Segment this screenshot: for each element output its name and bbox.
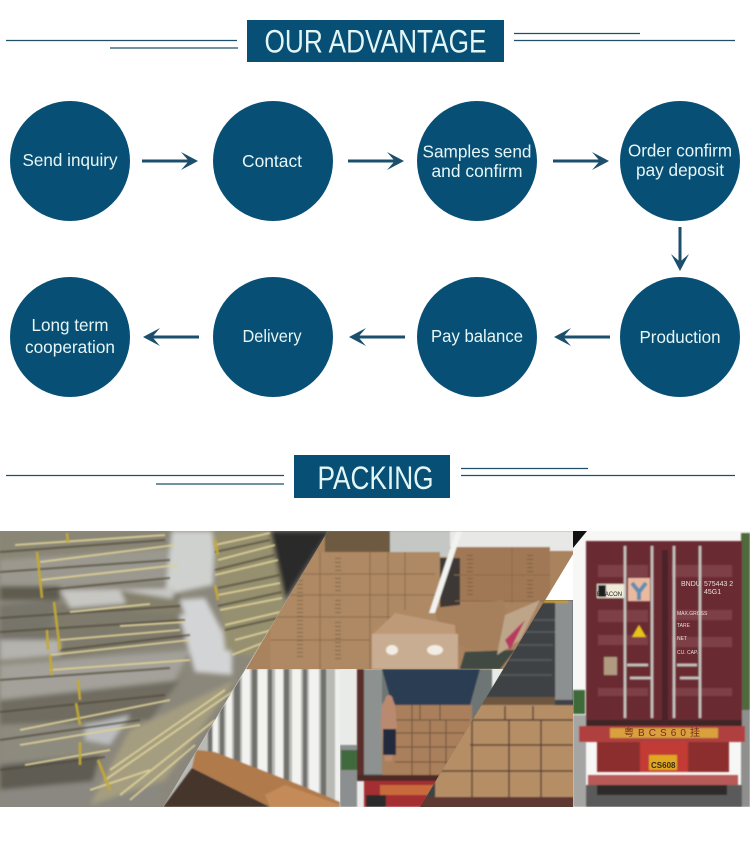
- container markings: 45G1: [704, 589, 721, 596]
- process step: order confirm pay deposit: [620, 101, 740, 221]
- process step: samples send and confirm: Samples send: [422, 142, 532, 162]
- photo: cartons loaded in container: [420, 600, 575, 807]
- process step: samples send and confirm: and confirm: [432, 161, 522, 181]
- section heading: packing: PACKING: [318, 460, 434, 496]
- container markings: TARE: [677, 623, 691, 629]
- process step: order confirm pay deposit: pay deposit: [636, 160, 724, 180]
- process step: pay balance: Pay balance: [431, 326, 523, 346]
- container markings: MAX.GROSS: [677, 611, 708, 617]
- process step: long term cooperation: cooperation: [25, 337, 115, 357]
- arrow: contact to samples: [348, 152, 404, 170]
- process step: long term cooperation: [10, 277, 130, 397]
- container markings: 575443 2: [704, 581, 733, 588]
- container markings: NET: [677, 636, 687, 642]
- process step: pay balance: [417, 277, 537, 397]
- section heading: our advantage: OUR ADVANTAGE: [264, 24, 486, 60]
- photo collage: packing and container loading: [0, 531, 750, 807]
- arrow: send inquiry to contact: [142, 152, 198, 170]
- container markings: [597, 581, 733, 770]
- photo: rear of shipping container on truck: [573, 531, 750, 807]
- container markings: CS608: [651, 761, 676, 770]
- section heading: our advantage: [6, 20, 735, 62]
- arrow: order down to production: [671, 227, 689, 271]
- photo: container wall with cartons: [160, 669, 342, 807]
- container markings: BNDU: [681, 581, 701, 588]
- photo: bundled items in plastic bags: [0, 531, 330, 807]
- process step: long term cooperation: Long term: [32, 315, 108, 335]
- section heading: packing: [6, 455, 735, 498]
- process step: contact: Contact: [242, 151, 302, 171]
- process step: production: [620, 277, 740, 397]
- process step: samples send and confirm: [417, 101, 537, 221]
- container markings: BEACON: [597, 592, 622, 598]
- arrow: delivery to long term: [143, 328, 199, 346]
- process step: delivery: [213, 277, 333, 397]
- process step: order confirm pay deposit: Order confirm: [628, 140, 732, 160]
- process step: send inquiry: [10, 101, 130, 221]
- process step: contact: [213, 101, 333, 221]
- arrow: production to pay balance: [554, 328, 610, 346]
- process step: production: Production: [640, 327, 720, 347]
- container markings: CU. CAP.: [677, 650, 698, 656]
- arrow: pay balance to delivery: [349, 328, 405, 346]
- container markings: 粤BCS60挂: [624, 726, 700, 739]
- process step: send inquiry: Send inquiry: [22, 150, 118, 170]
- photo: worker loading cartons into container: [340, 669, 505, 807]
- arrow: samples to order: [553, 152, 609, 170]
- process step: delivery: Delivery: [242, 326, 302, 346]
- photo: stacked cartons in warehouse: [246, 531, 591, 669]
